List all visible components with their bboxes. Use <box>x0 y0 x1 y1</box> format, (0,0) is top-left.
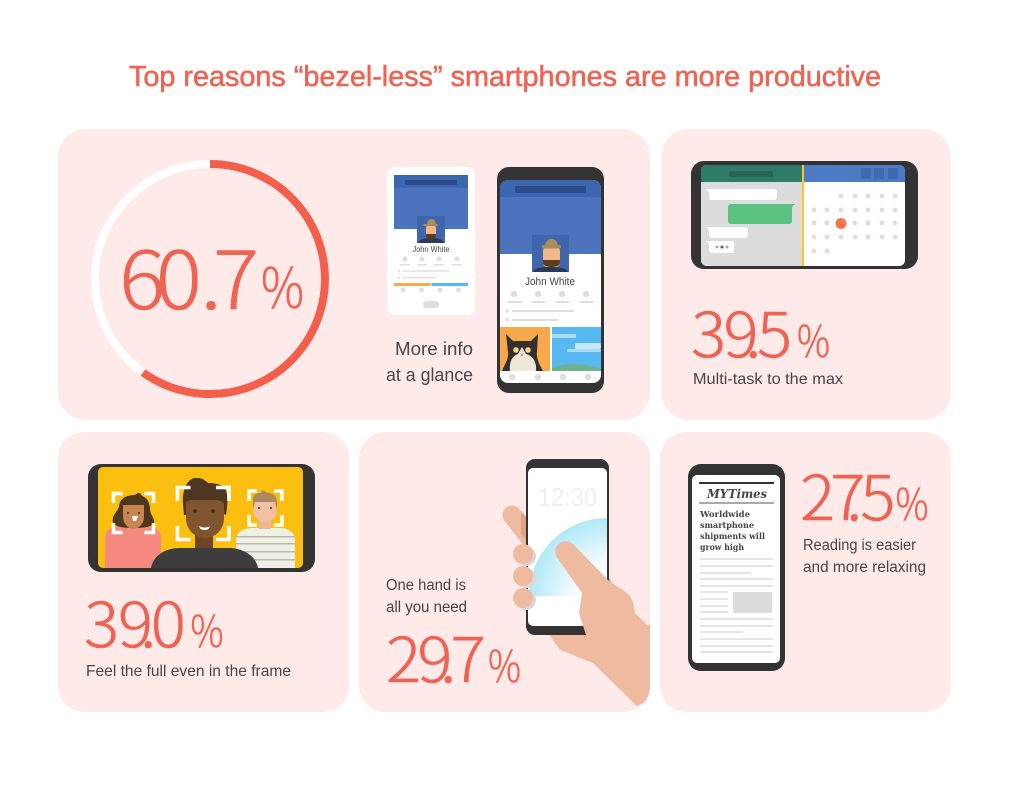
illustration: hand holding phone <box>512 459 650 706</box>
large bezel-less phone: John White <box>525 276 575 288</box>
portrait phone: newspaper: grow high <box>700 542 744 552</box>
stat: 29.7%: 29.7 <box>386 611 486 700</box>
portrait phone: newspaper: Worldwide <box>699 509 750 519</box>
label: one hand: One hand is <box>386 577 466 594</box>
landscape phone: group photo with face detection <box>88 464 315 572</box>
small phone with bezel <box>387 167 475 315</box>
stat: 60.7%: % <box>261 244 304 325</box>
stat: 27.5%: % <box>896 469 928 533</box>
text: more info at a glance <box>386 339 473 385</box>
label: reading is easier <box>803 537 926 576</box>
stat: 39.0%: % <box>190 596 224 660</box>
portrait phone: newspaper: MYTimes <box>706 487 767 501</box>
portrait phone: newspaper: shipments will <box>700 531 765 541</box>
label: one hand: all you need <box>386 599 467 616</box>
stat: 29.7%: % <box>488 631 521 695</box>
donut chart: 60.7% <box>95 164 325 394</box>
text: more info at a glance: at a glance <box>386 365 473 385</box>
landscape phone: chat and calendar split screen <box>691 161 918 269</box>
title: Top reasons “bezel-less” smartphones are more productive <box>129 61 881 93</box>
portrait phone: newspaper: smartphone <box>700 520 754 530</box>
panel: feel the full even in the frame <box>58 432 349 712</box>
stat: 39.5%: % <box>797 306 830 370</box>
stat: 60.7%: 60.7 <box>119 216 259 332</box>
panel: one hand is all you need <box>359 432 650 712</box>
label: reading is easier: and more relaxing <box>803 559 926 576</box>
label: multi-task: Multi-task to the max <box>693 371 843 388</box>
stat: 27.5%: 27.5 <box>800 449 896 538</box>
panel: reading is easier <box>660 432 951 712</box>
label: feel the full: Feel the full even in the frame <box>86 663 291 680</box>
small phone with bezel: John White <box>412 244 450 254</box>
stat: 39.5%: 39.5 <box>691 286 792 375</box>
portrait phone: newspaper <box>688 464 785 671</box>
label: one hand <box>386 577 467 616</box>
panel: multi-task to the max <box>661 129 951 420</box>
label: reading is easier: Reading is easier <box>803 537 916 554</box>
large bezel-less phone <box>497 167 605 393</box>
illustration: hand holding phone: 12:30 <box>538 482 597 512</box>
text: more info at a glance: More info <box>395 339 473 359</box>
stat: 39.0%: 39.0 <box>84 576 186 665</box>
panel: more info at a glance <box>58 129 650 420</box>
